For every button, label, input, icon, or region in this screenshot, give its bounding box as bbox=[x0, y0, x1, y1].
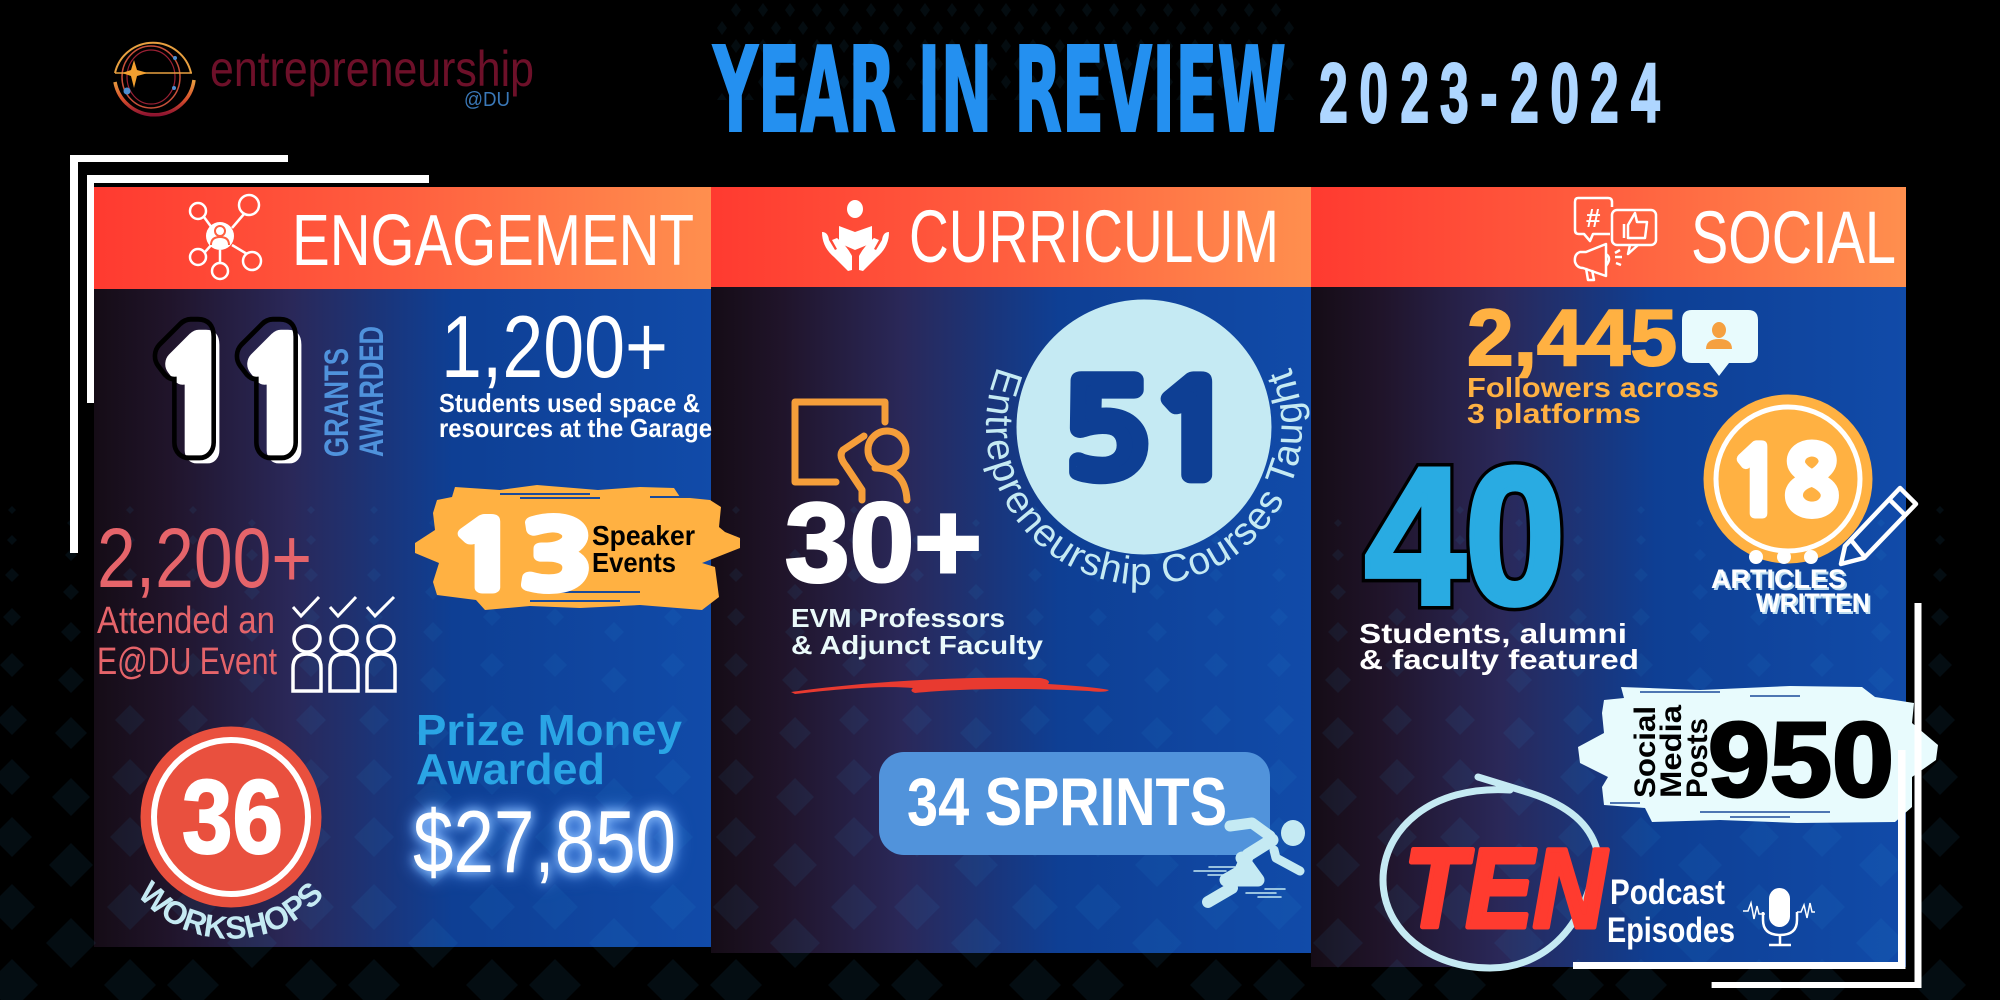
badge: 18 articles: 18 bbox=[1729, 437, 1839, 528]
badge: 18 articles bbox=[1704, 394, 1872, 620]
badge: 51 courses taught: Entrepreneurship Courses Taught bbox=[983, 368, 1310, 593]
decorative brackets top-left bbox=[70, 155, 429, 553]
stat: 13 speaker events: Speaker bbox=[592, 520, 695, 551]
icon: hands holding reader bbox=[822, 200, 889, 271]
stat: ten podcast episodes: Podcast bbox=[1610, 873, 1725, 912]
stat: 40 featured: 40 bbox=[1365, 428, 1565, 645]
stat: prize money bbox=[413, 706, 683, 891]
badge: 18 articles: WRITTEN bbox=[1758, 590, 1872, 620]
badge: 18 articles: ARTICLES bbox=[1713, 566, 1848, 596]
stat: prize money: Prize Money bbox=[416, 706, 683, 755]
logo icon: orbit rings and star bbox=[115, 43, 194, 115]
stat: 1,200+ students bbox=[439, 297, 712, 443]
stat: 13 speaker events bbox=[415, 485, 740, 610]
panel: engagement body bbox=[94, 287, 712, 947]
stat: 40 featured: 40 bbox=[1365, 428, 1565, 645]
panel: engagement content bbox=[97, 297, 740, 939]
stat: 950 social media posts bbox=[1578, 686, 1938, 823]
panel: curriculum content bbox=[785, 300, 1310, 908]
stat: 11 grants awarded: 11 bbox=[158, 328, 322, 474]
badge: 18 articles: WRITTEN bbox=[1756, 588, 1870, 618]
badge: 36 workshops: WORKSHOPS bbox=[140, 880, 322, 939]
stat: 40 featured bbox=[1359, 428, 1639, 675]
panel: social body bbox=[1311, 285, 1906, 967]
stat: 30+ professors: EVM Professors bbox=[791, 603, 1005, 633]
stat: 1,200+ students: Students used space & bbox=[439, 388, 700, 418]
badge: 36 workshops: 36 bbox=[182, 759, 283, 876]
header: social bbox=[1311, 187, 1906, 287]
heading: engagement: ENGAGEMENT bbox=[292, 201, 694, 281]
header: curriculum bbox=[711, 187, 1311, 287]
stat: 13 speaker events: 13 bbox=[449, 511, 592, 602]
logo: entrepreneurship @DU bbox=[115, 41, 534, 115]
heading: curriculum: CURRICULUM bbox=[909, 195, 1279, 278]
stat: 1,200+ students: 1,200+ bbox=[441, 297, 668, 396]
stat: 40 featured: Students, alumni bbox=[1359, 618, 1627, 649]
logo @DU: @DU bbox=[464, 89, 510, 111]
icon: teacher at board bbox=[795, 402, 907, 500]
stat: prize money: Awarded bbox=[416, 745, 605, 794]
stat: 2,445 followers: 2,445 bbox=[1467, 293, 1677, 382]
badge: 18 articles: ARTICLES bbox=[1711, 564, 1846, 594]
stat: 2,445 followers: 3 platforms bbox=[1467, 398, 1641, 429]
stat: 40 featured: & faculty featured bbox=[1359, 644, 1639, 675]
callout: 34 sprints bbox=[879, 752, 1270, 855]
stat: 1,200+ students: resources at the Garage bbox=[439, 413, 712, 443]
badge: 51 courses taught: 51 bbox=[1063, 369, 1237, 496]
icon: pencil bbox=[1841, 488, 1916, 564]
decorative brackets bottom-right bbox=[1573, 603, 1922, 988]
stat: 950 social media posts: Posts bbox=[1681, 718, 1714, 798]
icon: three people with checks bbox=[293, 597, 395, 691]
stat: 11 grants awarded: GRANTS bbox=[318, 348, 356, 457]
icon: microphone bbox=[1743, 888, 1815, 945]
panel: curriculum body bbox=[711, 285, 1311, 953]
stat: 2,445 followers: Followers across bbox=[1467, 372, 1719, 403]
stat: 2,200+ attended bbox=[97, 511, 312, 683]
subtitle: years: 2023-2024 bbox=[1319, 46, 1660, 140]
badge: 36 workshops bbox=[140, 726, 322, 939]
stat: 2,445 followers bbox=[1467, 293, 1719, 429]
panel: social content bbox=[1359, 293, 1938, 968]
stat: 11 grants awarded: AWARDED bbox=[353, 326, 391, 457]
title: YEAR IN REVIEW bbox=[712, 21, 1286, 159]
callout: 34 sprints: 34 SPRINTS bbox=[907, 764, 1227, 840]
stat: 30+ professors bbox=[785, 480, 1044, 660]
icon: network bbox=[190, 195, 261, 279]
stat: ten podcast episodes bbox=[1383, 777, 1735, 968]
icon: social media bubbles and megaphone: # bbox=[1586, 203, 1601, 233]
scribble underline bbox=[791, 678, 1109, 694]
icon: follower bubble bbox=[1682, 310, 1758, 376]
stat: 2,200+ attended: Attended an bbox=[97, 600, 275, 642]
icon: runner bbox=[1194, 820, 1305, 902]
icon: social media bubbles and megaphone bbox=[1575, 198, 1656, 280]
stat: 950 social media posts: Media bbox=[1655, 705, 1688, 798]
stat: 30+ professors: 30+ bbox=[785, 480, 982, 605]
stat: ten podcast episodes: TEN bbox=[1404, 826, 1608, 951]
stat: 2,200+ attended: E@DU Event bbox=[97, 641, 277, 683]
stat: 2,200+ attended: 2,200+ bbox=[97, 511, 312, 605]
stat: 950 social media posts: 950 bbox=[1708, 701, 1894, 819]
header: engagement bbox=[94, 187, 711, 289]
stat: ten podcast episodes: Episodes bbox=[1607, 911, 1735, 950]
stat: 950 social media posts: Social bbox=[1629, 706, 1662, 798]
stat: 30+ professors: & Adjunct Faculty bbox=[791, 630, 1044, 660]
stat: prize money: $27,850 bbox=[413, 792, 676, 891]
stat: 11 grants awarded: 11 bbox=[150, 320, 314, 466]
heading: social: SOCIAL bbox=[1691, 196, 1896, 279]
stat: 13 speaker events: Events bbox=[592, 547, 676, 578]
logo wordmark: entrepreneurship bbox=[210, 41, 534, 97]
